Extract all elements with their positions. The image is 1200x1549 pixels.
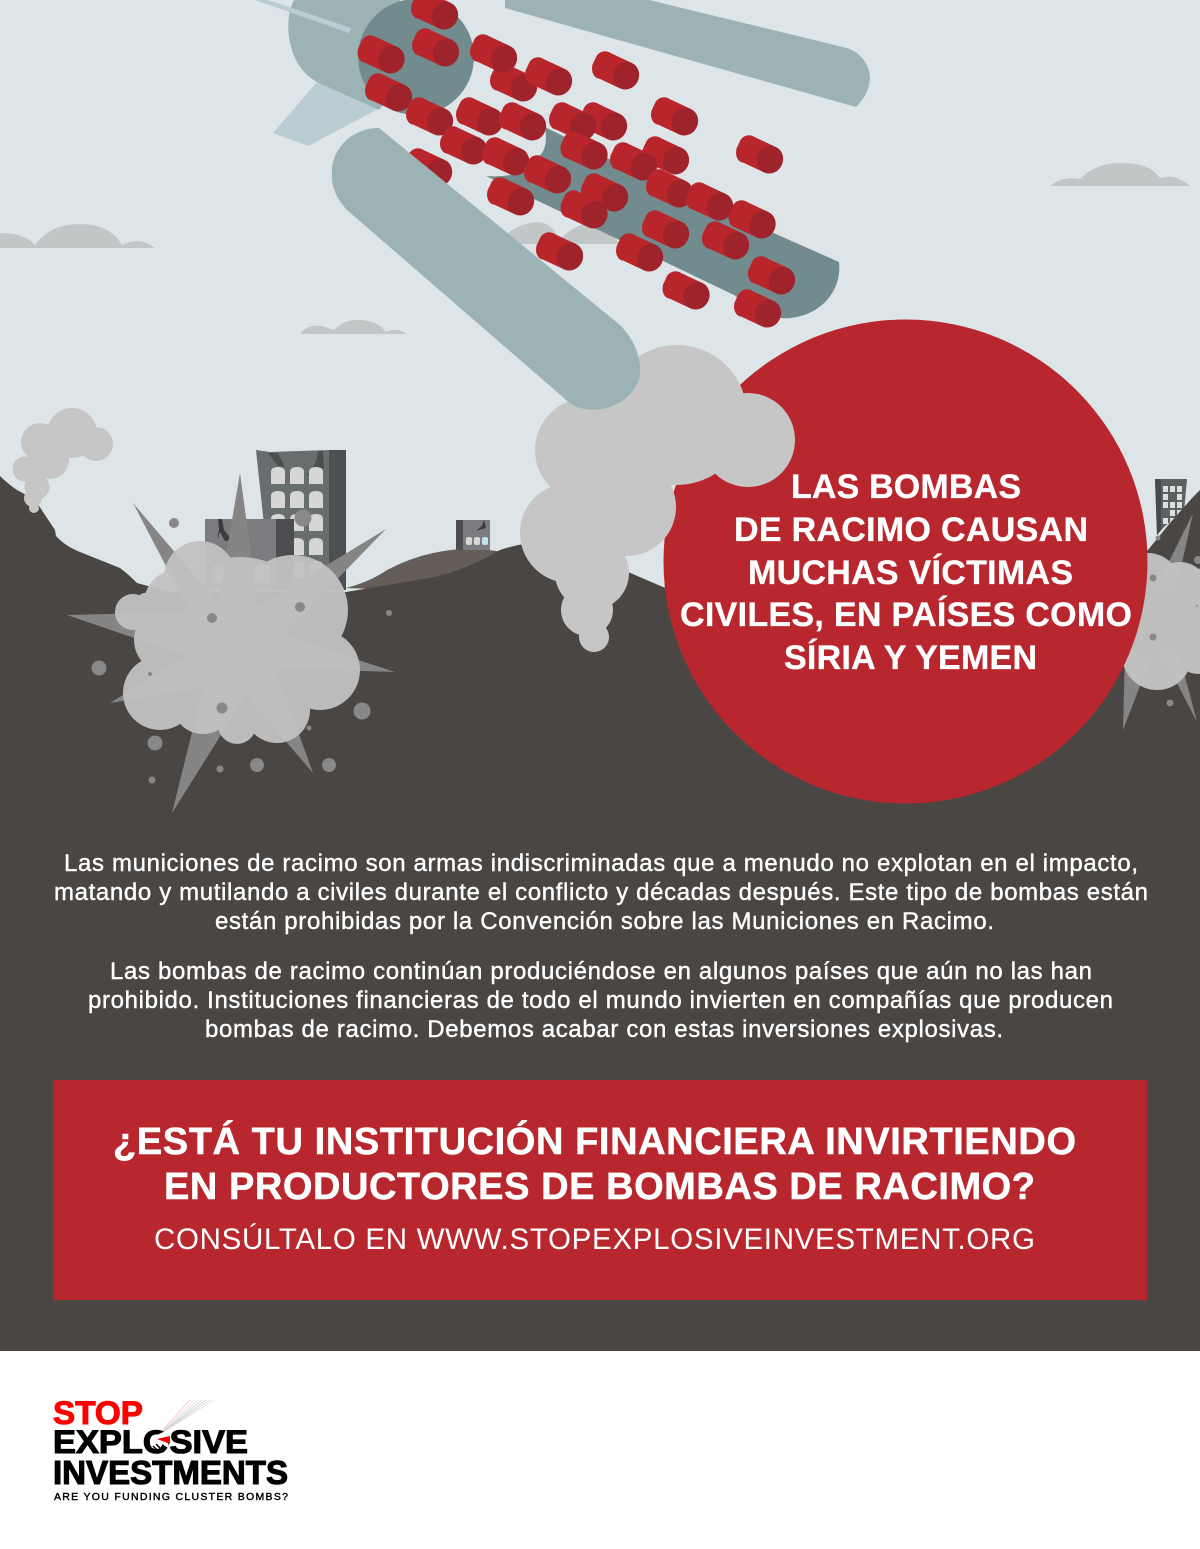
- logo word INVESTMENTS: INVESTMENTS: [53, 1454, 288, 1491]
- bomb: tail body: [288, 0, 420, 110]
- body text paragraph 1: están prohibidas por la Convención sobre las Municiones en Racimo.: [215, 908, 994, 935]
- explosion debris: [92, 510, 392, 784]
- explosion cloud: [115, 541, 360, 744]
- body text paragraph 1: [54, 850, 1148, 935]
- heading text: SÍRIA Y YEMEN: [784, 639, 1037, 677]
- explosion: left: [67, 473, 395, 813]
- explosion: right: [1112, 513, 1200, 730]
- bomb: lower fin: [332, 128, 640, 410]
- logo rays: [156, 1400, 214, 1437]
- heading text: LAS BOMBAS: [791, 468, 1021, 506]
- brown hill: [346, 549, 505, 590]
- cluster of bomblets: [354, 0, 800, 332]
- explosion spikes: [67, 473, 395, 813]
- heading text: [680, 468, 1132, 677]
- white footer band: [0, 1351, 1200, 1549]
- bomb: upper fin: [505, 0, 870, 107]
- call-to-action panel: [53, 1080, 1147, 1300]
- logo word STOP: STOP: [53, 1395, 143, 1431]
- dark ground: [0, 476, 1200, 1351]
- smoke plume: centre: [520, 345, 795, 652]
- bomb: rear tail stabiliser: [273, 82, 380, 146]
- bomb: antenna stripe: [255, 0, 351, 33]
- body text paragraph 2: Las bombas de racimo continúan produciéndose en algunos países que aún no las han: [110, 958, 1092, 985]
- smoke plume: left: [12, 408, 113, 513]
- building: small distant house: [456, 520, 490, 550]
- heading text: CIVILES, EN PAÍSES COMO: [680, 596, 1132, 634]
- logo tagline: ARE YOU FUNDING CLUSTER BOMBS?: [54, 1491, 288, 1503]
- call-to-action headline: ¿ESTÁ TU INSTITUCIÓN FINANCIERA INVIRTIENDO: [113, 1119, 1076, 1163]
- body text paragraph 2: prohibido. Instituciones financieras de todo el mundo invierten en compañías que producen: [88, 987, 1113, 1014]
- call-to-action link line: CONSÚLTALO EN WWW.STOPEXPLOSIVEINVESTMENT.ORG: [154, 1223, 1035, 1256]
- logo: Stop Explosive Investments: [53, 1395, 288, 1503]
- logo bomb mark: [152, 1430, 170, 1453]
- bomb: inner dark opening: [358, 0, 474, 115]
- building: far right tower: [1155, 479, 1187, 535]
- building: low grey block: [205, 519, 294, 589]
- bomb: open lower body: [486, 127, 839, 318]
- call-to-action headline: EN PRODUCTORES DE BOMBAS DE RACIMO?: [164, 1166, 1035, 1208]
- background clouds: [0, 163, 1190, 334]
- heading text: MUCHAS VÍCTIMAS: [748, 554, 1073, 592]
- heading text: DE RACIMO CAUSAN: [734, 511, 1088, 549]
- body text paragraph 1: matando y mutilando a civiles durante el conflicto y décadas después. Este tipo de bombas están: [54, 879, 1148, 906]
- bomblet behind fin: [401, 145, 457, 191]
- body text paragraph 1: Las municiones de racimo son armas indiscriminadas que a menudo no explotan en el impacto,: [64, 850, 1138, 877]
- body text paragraph 2: bombas de racimo. Debemos acabar con estas inversiones explosivas.: [205, 1016, 1003, 1043]
- bomb casing: [255, 0, 870, 410]
- call-to-action headline: [113, 1119, 1076, 1208]
- red circle panel: [664, 320, 1148, 804]
- building: large damaged tower: [256, 450, 346, 590]
- logo word EXPLOSIVE: EXPLOSIVE: [53, 1424, 248, 1460]
- body text paragraph 2: [88, 958, 1113, 1043]
